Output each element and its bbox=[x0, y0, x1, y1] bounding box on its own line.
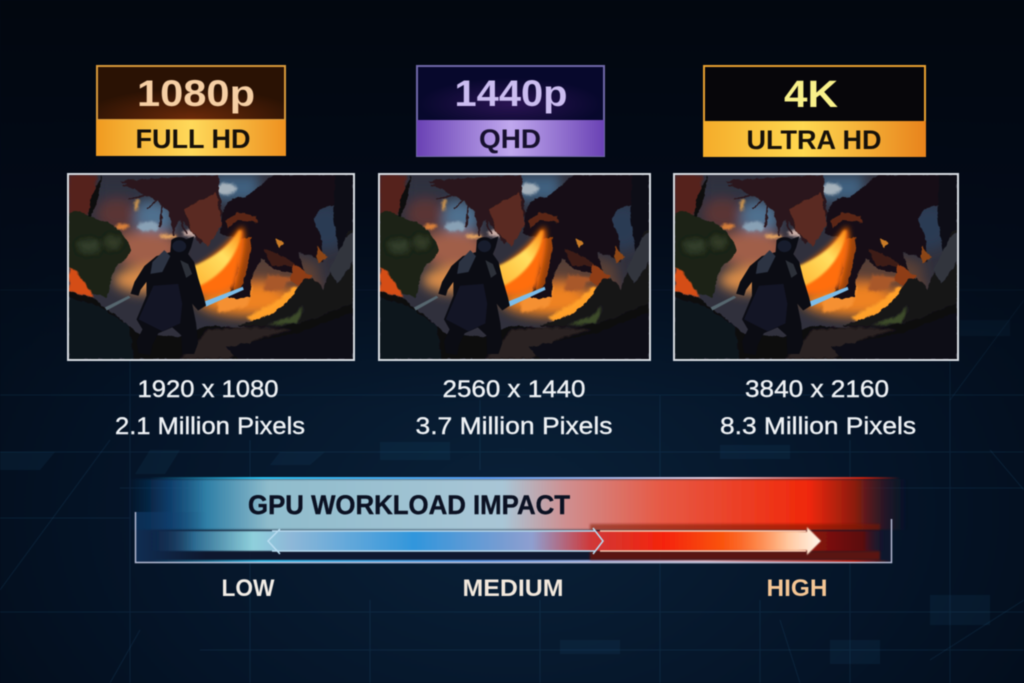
screenshot: 1440p bbox=[378, 173, 651, 361]
badge: 1440p QHD: QHD bbox=[479, 124, 541, 154]
arrow: medium to high bbox=[600, 527, 821, 555]
badge: 1440p QHD: 1440p bbox=[454, 73, 568, 114]
badge: 1080p Full HD: 1080p bbox=[137, 73, 255, 114]
caption: 1440p resolution bbox=[416, 376, 612, 440]
label: medium: MEDIUM bbox=[462, 575, 564, 602]
badge: 1080p Full HD bbox=[96, 65, 286, 156]
screenshot: 1080p bbox=[67, 173, 355, 361]
caption: 4K resolution: 3840 x 2160 bbox=[745, 376, 889, 403]
meter top glow band bbox=[128, 479, 910, 530]
caption: 1080p resolution: 1920 x 1080 bbox=[138, 376, 278, 403]
caption: 4K resolution bbox=[720, 376, 916, 440]
meter title: GPU WORKLOAD IMPACT bbox=[248, 490, 570, 520]
arrow: low to medium bbox=[268, 528, 603, 554]
caption: 1080p resolution bbox=[115, 376, 305, 440]
label: high: HIGH bbox=[766, 575, 828, 602]
meter lower gradient track bbox=[150, 531, 885, 551]
workload meter bbox=[128, 477, 910, 602]
label: low: LOW bbox=[222, 575, 275, 602]
badge: 1440p QHD bbox=[416, 65, 605, 157]
meter bracket bbox=[136, 512, 892, 562]
caption: 1440p resolution: 2560 x 1440 bbox=[442, 376, 586, 403]
caption: 1440p resolution: 3.7 Million Pixels bbox=[416, 413, 612, 440]
badge: 4K Ultra HD: ULTRA HD bbox=[746, 125, 882, 155]
caption: 4K resolution: 8.3 Million Pixels bbox=[720, 413, 916, 440]
badge: 1080p Full HD: FULL HD bbox=[136, 124, 250, 154]
screenshot: 4K bbox=[673, 173, 959, 361]
badge: 4K Ultra HD bbox=[703, 65, 926, 157]
badge: 4K Ultra HD: 4K bbox=[784, 74, 839, 116]
caption: 1080p resolution: 2.1 Million Pixels bbox=[115, 413, 305, 440]
